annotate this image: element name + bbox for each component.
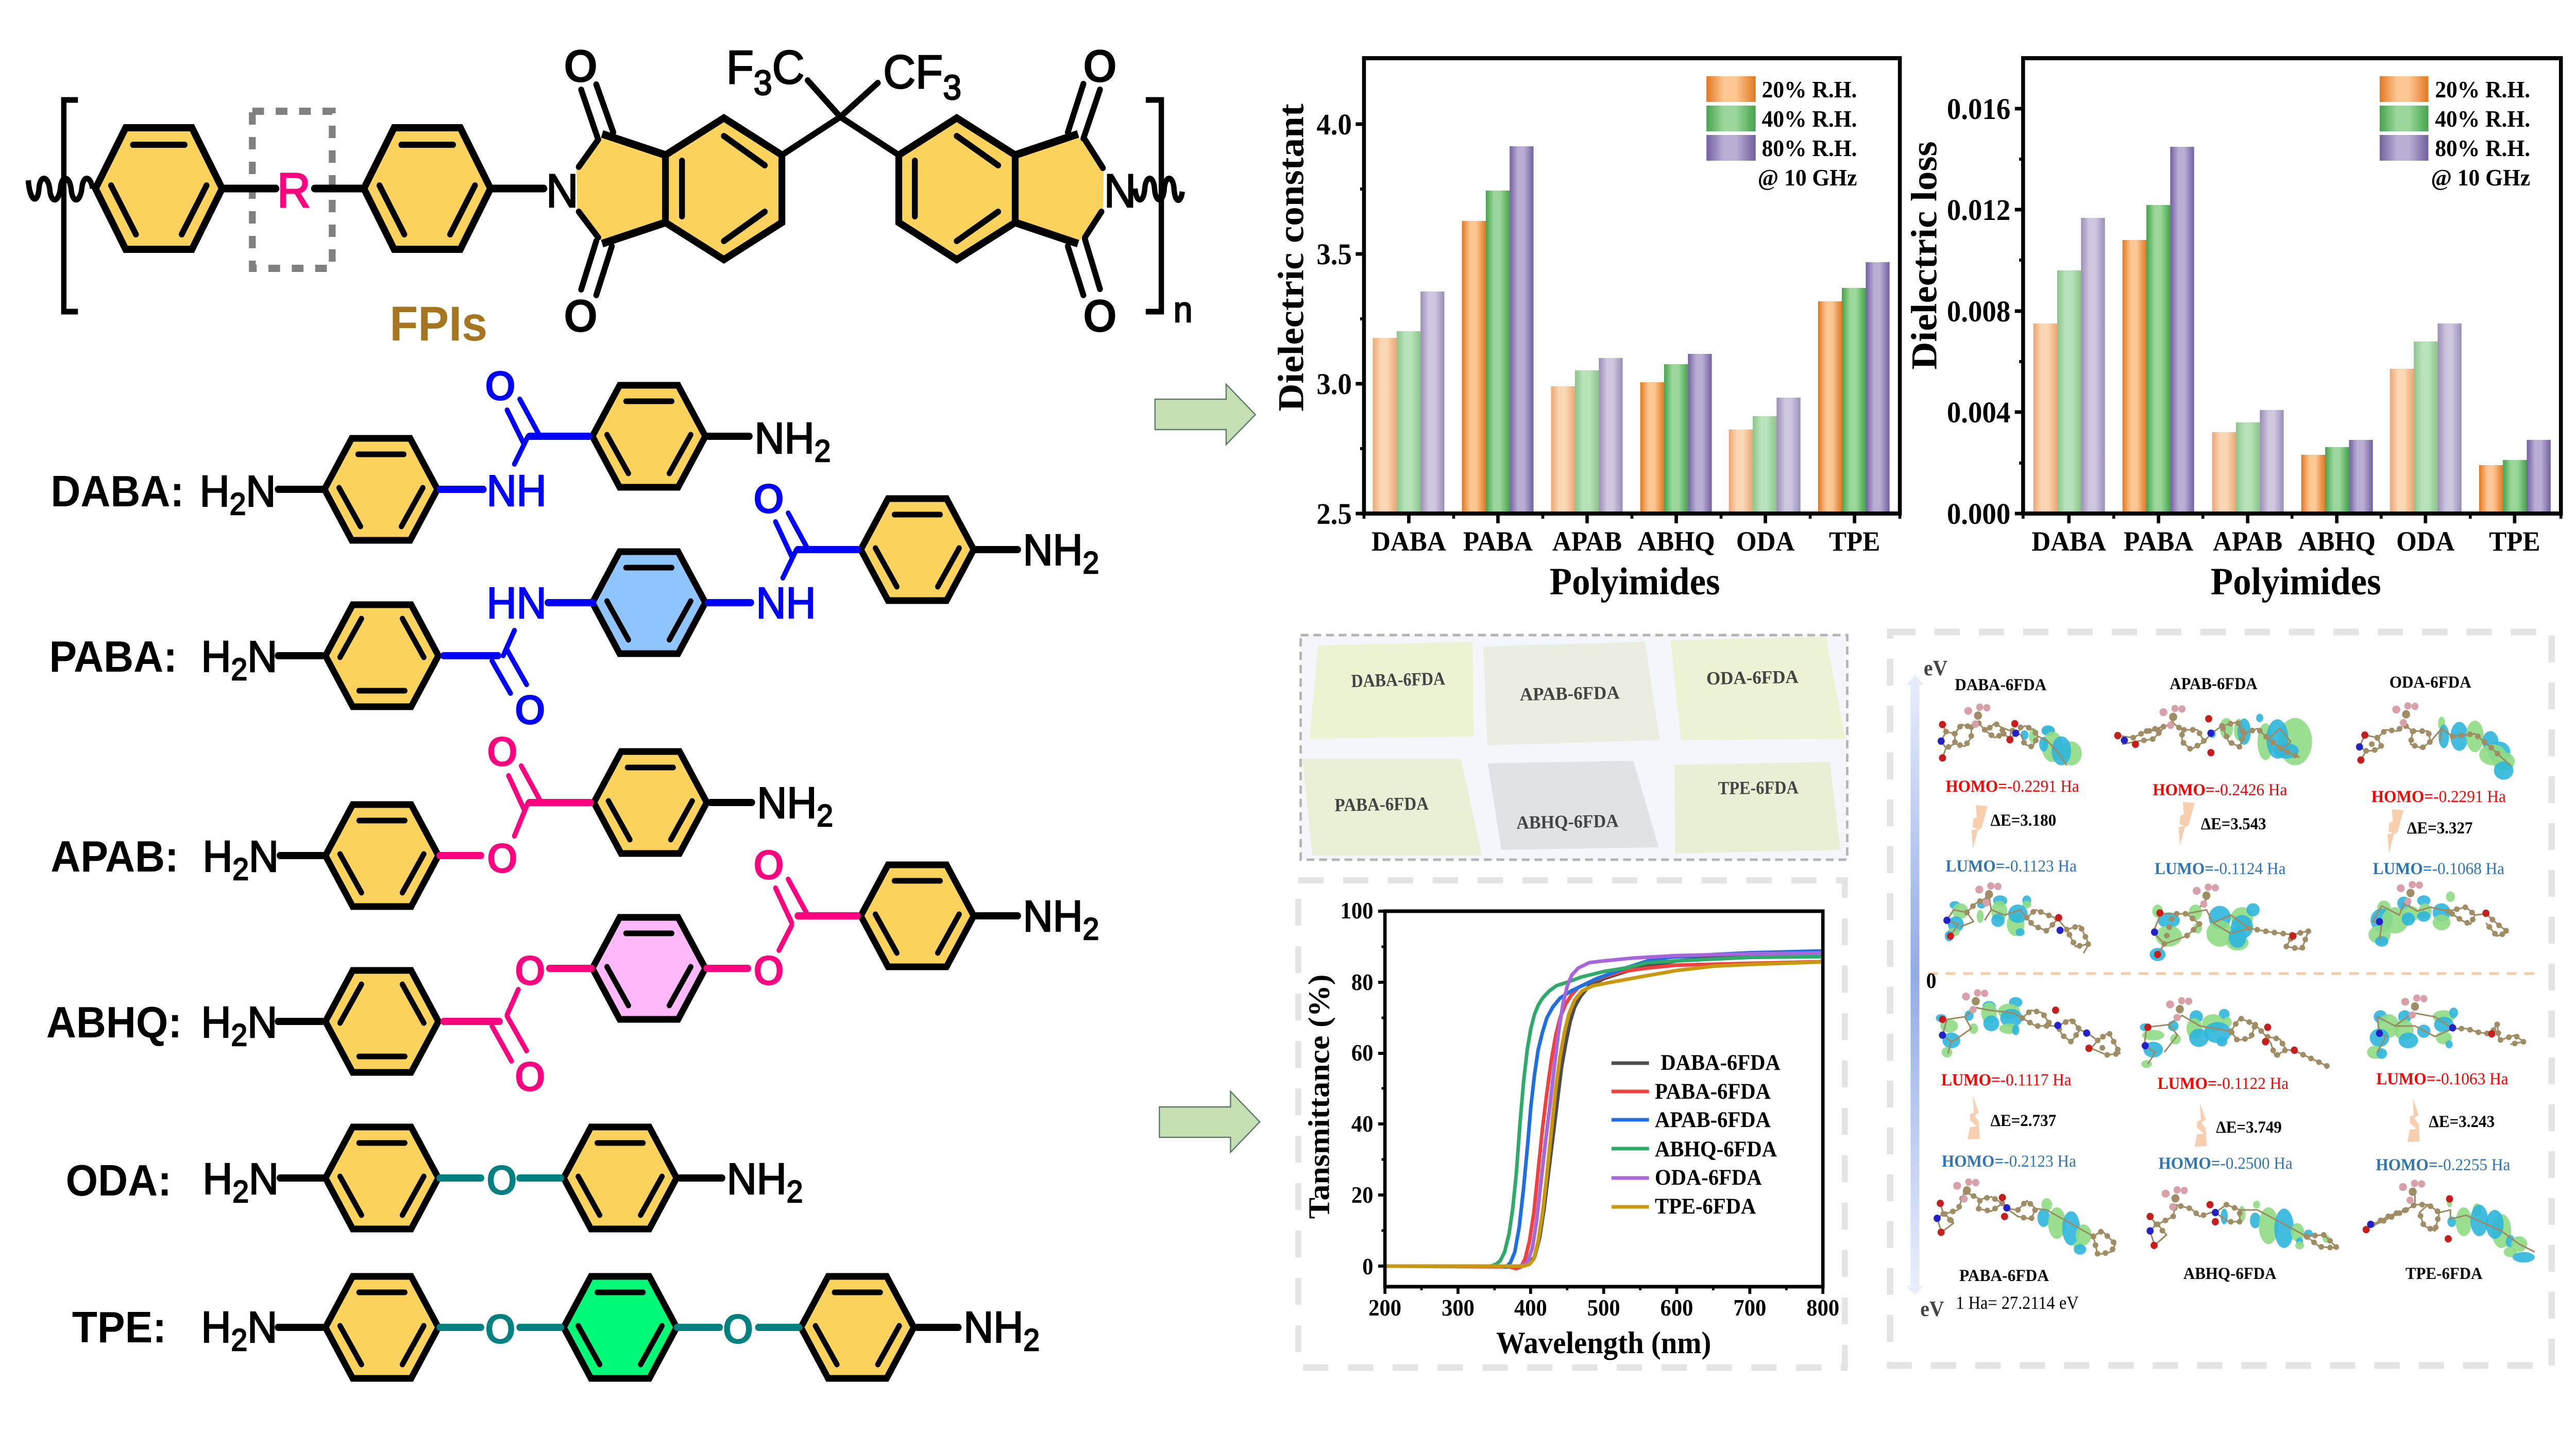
R label: R (277, 163, 311, 218)
y tick labels: 2.5 (1316, 498, 1352, 531)
y tick labels: 0.008 (1947, 296, 2010, 328)
atom labels: O (564, 290, 598, 342)
ODA monomer: N (249, 1154, 279, 1203)
atom labels: N (546, 164, 579, 217)
FPIs general polymer structure (28, 40, 1193, 351)
APAB monomer: H (202, 832, 232, 881)
ABHQ-6FDA LUMO molecule (2140, 997, 2328, 1068)
TPE-6FDA HOMO molecule (2363, 1180, 2535, 1262)
x axis title: Polyimides (1550, 560, 1720, 603)
x tick labels: DABA (1371, 526, 1446, 557)
atom labels: O (564, 40, 598, 92)
PABA monomer: H (201, 632, 231, 681)
ABHQ-6FDA HOMO molecule (2146, 1186, 2337, 1250)
DABA monomer: 2 (230, 487, 246, 521)
energy axis arrows (1906, 675, 1924, 1295)
film labels: PABA-6FDA (1334, 793, 1429, 815)
y tick labels: 3.5 (1316, 238, 1352, 271)
panel: frontier orbital energy levels (1890, 632, 2552, 1365)
band gap values: ΔE=3.243 (2429, 1112, 2495, 1131)
lower orbital energies in blue: HOMO=-0.2255 Ha (2376, 1155, 2510, 1174)
y tick labels: 3.0 (1316, 368, 1352, 401)
legend: 40% R.H. (1762, 106, 1857, 132)
y tick labels (1947, 93, 2010, 531)
legend: DABA-6FDA (1660, 1051, 1781, 1075)
ODA monomer: O (486, 1156, 517, 1203)
APAB monomer (50, 728, 833, 907)
x tick labels: 200 (1368, 1295, 1401, 1321)
atom labels: 3 (943, 68, 961, 107)
DABA monomer: 2 (815, 434, 831, 468)
DABA monomer (50, 362, 831, 540)
lower orbital energies in blue: HOMO=-0.2500 Ha (2159, 1153, 2293, 1172)
legend: PABA-6FDA (1655, 1080, 1771, 1104)
DABA monomer: DABA: (50, 467, 184, 516)
lower orbital energies in blue: HOMO=-0.2123 Ha (1942, 1151, 2076, 1170)
legend (1612, 1051, 1781, 1219)
energy axis labels: eV (1920, 1297, 1944, 1321)
panel: photo of polyimide films (1301, 635, 1847, 860)
benzene rings (95, 128, 490, 249)
atom labels: O (1083, 40, 1117, 92)
atom labels: F (726, 41, 754, 94)
legend (2380, 76, 2530, 191)
x tick labels (1371, 526, 1880, 557)
legend: ODA-6FDA (1655, 1166, 1762, 1190)
axes frame and ticks (1378, 911, 1823, 1294)
y tick labels: 0 (1362, 1254, 1373, 1279)
ABHQ monomer (46, 841, 1099, 1100)
atom labels: O (1083, 290, 1117, 342)
upper orbital energies in red: LUMO=-0.1117 Ha (1941, 1070, 2071, 1089)
lower orbital energies in blue (1942, 856, 2510, 1174)
x tick labels: TPE (2489, 526, 2540, 557)
band gap values: ΔE=3.180 (1990, 810, 2056, 829)
y tick labels: 0.004 (1947, 397, 2010, 429)
legend (1706, 76, 1857, 191)
ODA monomer: 2 (787, 1175, 803, 1209)
polymer names: TPE-6FDA (2405, 1264, 2482, 1283)
atom labels: C (772, 41, 805, 94)
legend: 20% R.H. (1762, 76, 1857, 103)
polymer names (1955, 672, 2482, 1285)
TPE monomer: H (201, 1303, 231, 1352)
TPE monomer: N (247, 1303, 277, 1352)
upper orbital energies in red: HOMO=-0.2291 Ha (1945, 776, 2079, 795)
energy axis labels: eV (1924, 656, 1948, 680)
y tick labels: 0.012 (1947, 194, 2010, 227)
arrow: structures to optical properties (1159, 1091, 1260, 1152)
legend: ABHQ-6FDA (1655, 1137, 1777, 1162)
wavy chain ends (28, 178, 1182, 200)
y axis title: Dielectric constant (1270, 104, 1311, 412)
PABA monomer (49, 475, 1099, 733)
TPE monomer: O (485, 1305, 516, 1352)
ABHQ monomer: NH (1023, 892, 1083, 941)
DABA monomer: H (200, 467, 230, 516)
PABA monomer: 2 (231, 653, 247, 687)
atom labels: N (1104, 164, 1136, 217)
PABA monomer: NH (756, 578, 816, 627)
y tick labels: 80 (1351, 970, 1373, 995)
x tick labels: 400 (1514, 1295, 1547, 1321)
y tick labels (1341, 898, 1373, 1279)
y tick labels: 0.016 (1947, 93, 2010, 126)
x tick labels: PABA (2124, 526, 2193, 557)
APAB-6FDA LUMO molecule (2149, 883, 2309, 961)
upper orbital energies in red: HOMO=-0.2291 Ha (2371, 787, 2506, 806)
y tick labels: 0.000 (1947, 498, 2010, 531)
polymer names: ABHQ-6FDA (2183, 1264, 2276, 1283)
polymer names: PABA-6FDA (1959, 1266, 2049, 1285)
energy axis labels: 0 (1926, 969, 1937, 993)
DABA monomer: N (246, 467, 276, 516)
band gap values: ΔE=3.749 (2216, 1117, 2282, 1136)
TPE monomer: TPE: (72, 1303, 166, 1352)
film sheets (1302, 637, 1845, 856)
axes frame and ticks (1355, 58, 1900, 523)
x tick labels: APAB (1552, 526, 1622, 557)
PABA monomer: HN (487, 578, 547, 627)
APAB monomer: 2 (817, 799, 833, 833)
DABA monomer: O (485, 362, 516, 409)
ODA monomer: ODA: (66, 1156, 172, 1205)
film labels (1334, 667, 1799, 833)
PABA monomer: 2 (1083, 546, 1099, 580)
x tick labels: 800 (1806, 1295, 1839, 1321)
legend: 40% R.H. (2435, 106, 2530, 132)
x axis title: Polyimides (2211, 560, 2381, 603)
x tick labels (2031, 526, 2540, 557)
APAB monomer: O (487, 834, 518, 881)
lower orbital energies in blue: LUMO=-0.1124 Ha (2155, 859, 2285, 878)
polymer brackets (64, 100, 1161, 312)
ABHQ monomer: O (753, 947, 784, 994)
panel: transmittance chart (1298, 880, 1845, 1368)
APAB monomer: O (487, 728, 518, 775)
film labels: TPE-6FDA (1718, 777, 1799, 798)
band gap values: ΔE=3.327 (2407, 818, 2473, 837)
ABHQ monomer: O (515, 947, 546, 994)
zero energy line (1928, 972, 2538, 975)
lower orbital energies in blue: LUMO=-0.1123 Ha (1945, 856, 2077, 875)
ODA monomer (66, 1127, 803, 1229)
band gap values (1990, 810, 2495, 1136)
PABA monomer: N (247, 632, 277, 681)
polymer names: APAB-6FDA (2170, 674, 2258, 693)
legend: TPE-6FDA (1655, 1194, 1756, 1219)
x tick labels: 500 (1587, 1295, 1620, 1321)
TPE monomer: 2 (1023, 1323, 1040, 1357)
ABHQ monomer: N (247, 998, 277, 1047)
x tick labels: ABHQ (1637, 526, 1715, 557)
x tick labels: 300 (1442, 1295, 1475, 1321)
legend: 80% R.H. (2435, 135, 2530, 161)
ODA monomer: NH (727, 1154, 787, 1203)
ABHQ monomer: H (201, 998, 231, 1047)
PABA monomer: O (753, 475, 784, 522)
orbital isosurfaces below zero (1934, 989, 2535, 1262)
bars (1373, 146, 1890, 512)
atom labels: n (1174, 289, 1193, 330)
energy axis labels (1920, 656, 1948, 1321)
ABHQ monomer: ABHQ: (46, 998, 182, 1047)
DABA-6FDA HOMO molecule (1938, 704, 2082, 765)
y tick labels: 40 (1351, 1112, 1373, 1137)
ODA monomer: 2 (232, 1175, 249, 1209)
TPE monomer: 2 (231, 1323, 247, 1357)
DABA monomer: NH (487, 466, 547, 515)
PABA monomer: NH (1023, 525, 1083, 574)
ABHQ monomer: 2 (1083, 912, 1099, 946)
APAB monomer: NH (757, 778, 817, 827)
orbital isosurfaces above zero (1938, 702, 2515, 961)
polymer names: DABA-6FDA (1955, 675, 2046, 694)
transmittance curves (1385, 951, 1823, 1269)
arrow: structures to dielectric properties (1155, 384, 1256, 445)
ODA monomer: H (202, 1154, 232, 1203)
legend: 80% R.H. (1762, 135, 1857, 161)
PABA monomer: O (515, 686, 546, 733)
x tick labels: 600 (1660, 1295, 1693, 1321)
x tick labels: TPE (1829, 526, 1880, 557)
atom labels: 3 (754, 63, 772, 103)
TPE monomer (72, 1276, 1040, 1378)
x tick labels: PABA (1463, 526, 1533, 557)
y tick labels: 20 (1351, 1183, 1373, 1208)
lower orbital energies in blue: LUMO=-0.1068 Ha (2373, 859, 2504, 878)
y axis title: Tansmittance (%) (1302, 975, 1336, 1219)
bars (2033, 147, 2551, 512)
film labels: APAB-6FDA (1520, 682, 1620, 705)
connecting bonds (225, 184, 544, 193)
y axis title: Dielectric loss (1904, 141, 1944, 370)
x axis title: Wavelength (nm) (1496, 1326, 1711, 1360)
bar chart: dielectric loss (1904, 58, 2561, 603)
x tick labels: ODA (1736, 526, 1794, 557)
film labels: DABA-6FDA (1351, 668, 1446, 691)
atom labels: CF (883, 45, 943, 98)
x tick labels: DABA (2031, 526, 2106, 557)
x tick labels: 700 (1733, 1295, 1766, 1321)
x tick labels (1368, 1295, 1839, 1321)
band gap values: ΔE=3.543 (2201, 814, 2266, 833)
y tick labels (1316, 109, 1352, 531)
APAB monomer: APAB: (50, 832, 179, 881)
PABA monomer: PABA: (49, 632, 177, 681)
TPE monomer: NH (963, 1303, 1023, 1352)
ODA-6FDA HOMO molecule (2356, 702, 2515, 780)
film labels: ODA-6FDA (1706, 667, 1799, 689)
ODA-6FDA LUMO molecule (2368, 881, 2508, 947)
ABHQ monomer: O (753, 841, 784, 888)
y tick labels: 100 (1341, 898, 1373, 924)
polymer names: ODA-6FDA (2389, 672, 2471, 691)
lightning bolt icons (1968, 802, 2419, 1147)
axes frame and ticks (2015, 58, 2561, 523)
PABA-6FDA LUMO molecule (1936, 989, 2120, 1057)
y tick labels: 4.0 (1316, 109, 1352, 141)
upper orbital energies in red: HOMO=-0.2426 Ha (2153, 780, 2287, 799)
legend: @ 10 GHz (2431, 164, 2530, 191)
DABA monomer: NH (755, 414, 815, 463)
DABA-6FDA LUMO molecule (1943, 882, 2089, 953)
legend: @ 10 GHz (1758, 164, 1857, 191)
TPE-6FDA LUMO molecule (2367, 995, 2523, 1059)
upper orbital energies in red: LUMO=-0.1063 Ha (2376, 1069, 2509, 1088)
atom labels (546, 40, 1193, 342)
ABHQ monomer: O (515, 1053, 546, 1100)
R group dashed box (252, 111, 332, 268)
band gap values: ΔE=2.737 (1990, 1111, 2056, 1130)
APAB-6FDA HOMO molecule (2114, 705, 2312, 765)
imide and dianhydride core (577, 80, 1104, 295)
upper orbital energies in red (1941, 776, 2509, 1092)
FPIs label: FPIs (389, 296, 487, 351)
x tick labels: ODA (2396, 526, 2455, 557)
unit conversion note: 1 Ha= 27.2114 eV (1956, 1292, 2079, 1313)
y tick labels: 60 (1351, 1040, 1373, 1066)
TPE monomer: O (722, 1305, 754, 1352)
PABA-6FDA HOMO molecule (1934, 1179, 2115, 1255)
film labels: ABHQ-6FDA (1516, 810, 1619, 833)
APAB monomer: N (249, 832, 279, 881)
x tick labels: ABHQ (2298, 526, 2376, 557)
bar chart: dielectric constant (1270, 58, 1900, 603)
APAB monomer: 2 (232, 852, 249, 886)
legend: 20% R.H. (2435, 76, 2530, 103)
legend: APAB-6FDA (1655, 1108, 1771, 1132)
upper orbital energies in red: LUMO=-0.1122 Ha (2158, 1073, 2289, 1092)
ABHQ monomer: 2 (231, 1018, 247, 1052)
x tick labels: APAB (2213, 526, 2282, 557)
